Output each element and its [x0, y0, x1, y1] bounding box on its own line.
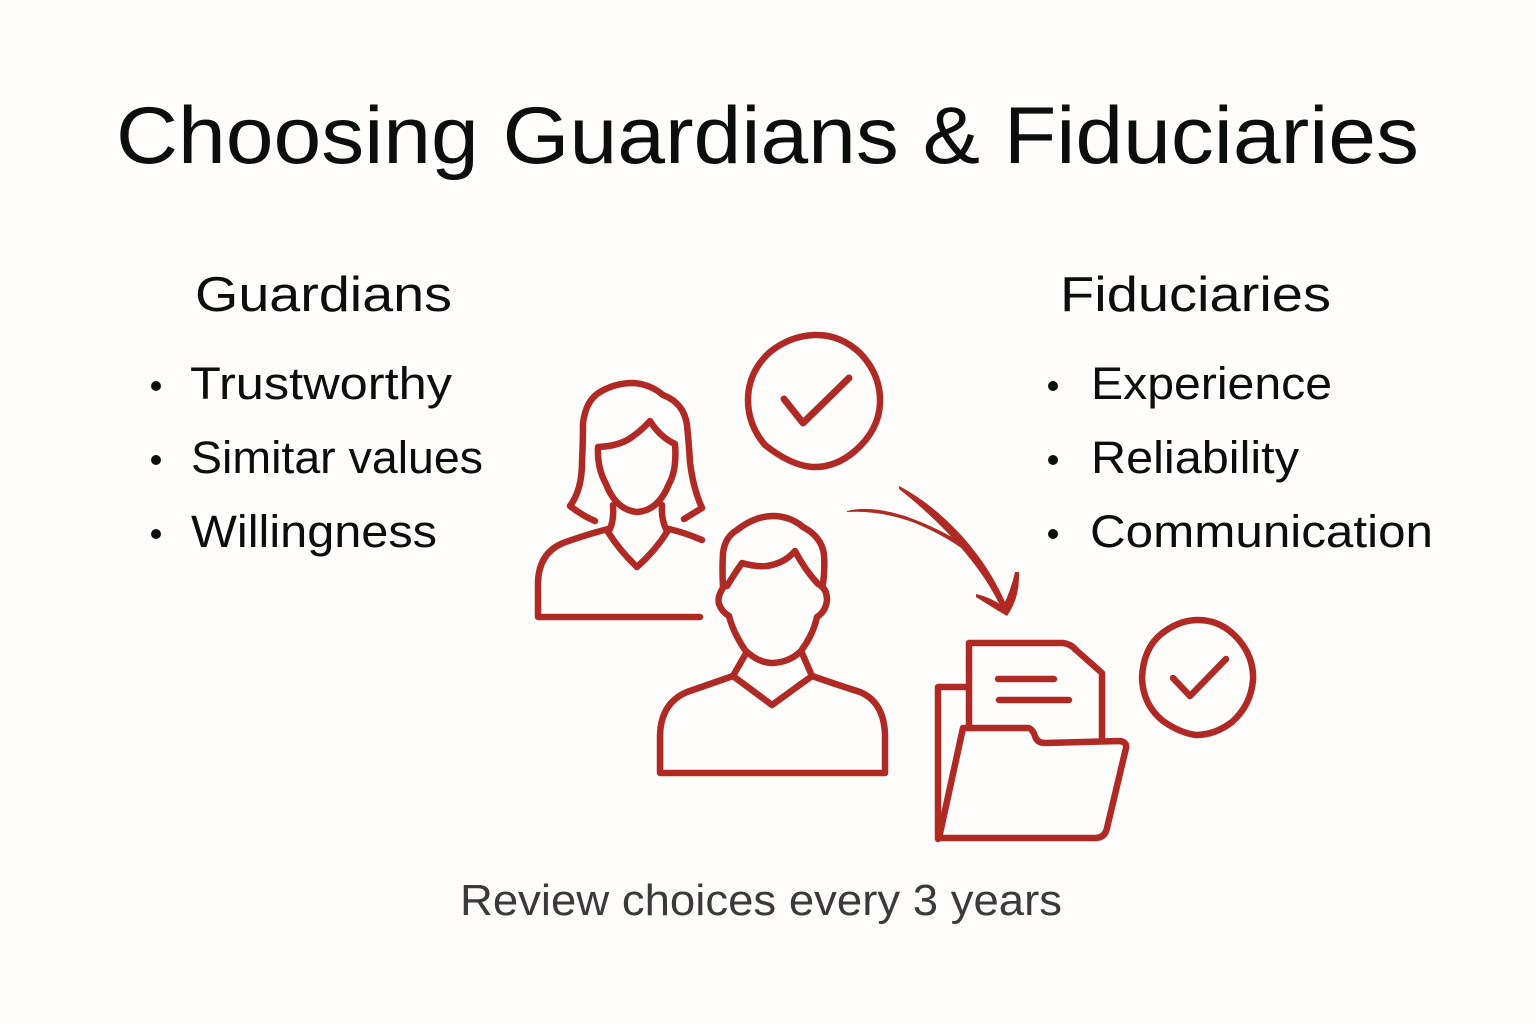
- bullet: trustworthy: Trustworthy: [190, 358, 453, 409]
- document lines: [998, 679, 1069, 700]
- guardians list: [151, 358, 483, 557]
- title: Choosing Guardians & Fiduciaries: [116, 91, 1419, 181]
- heading: guardians: Guardians: [195, 268, 452, 322]
- folder front: [939, 728, 1126, 838]
- fiduciaries list: [1048, 358, 1433, 557]
- icon: check badge large: [748, 335, 880, 467]
- panel: guardians: [151, 268, 483, 557]
- arrow: people to folder: [847, 486, 1019, 616]
- footer note: Review choices every 3 years: [460, 876, 1062, 925]
- bullet: similar values: Simitar values: [191, 432, 483, 483]
- bullet: experience: Experience: [1091, 358, 1332, 409]
- icon: folder with document: [938, 643, 1126, 839]
- bullet: reliability: Reliability: [1091, 432, 1300, 483]
- icon: woman: [538, 383, 702, 617]
- bullet: communication: Communication: [1090, 506, 1433, 557]
- heading: fiduciaries: Fiduciaries: [1060, 268, 1331, 322]
- bullet: willingness: Willingness: [191, 506, 437, 557]
- icon: man: [660, 516, 885, 773]
- panel: fiduciaries: [1048, 268, 1433, 557]
- folder back: [938, 687, 966, 839]
- icon: check badge small: [1142, 620, 1253, 735]
- document: [969, 643, 1102, 740]
